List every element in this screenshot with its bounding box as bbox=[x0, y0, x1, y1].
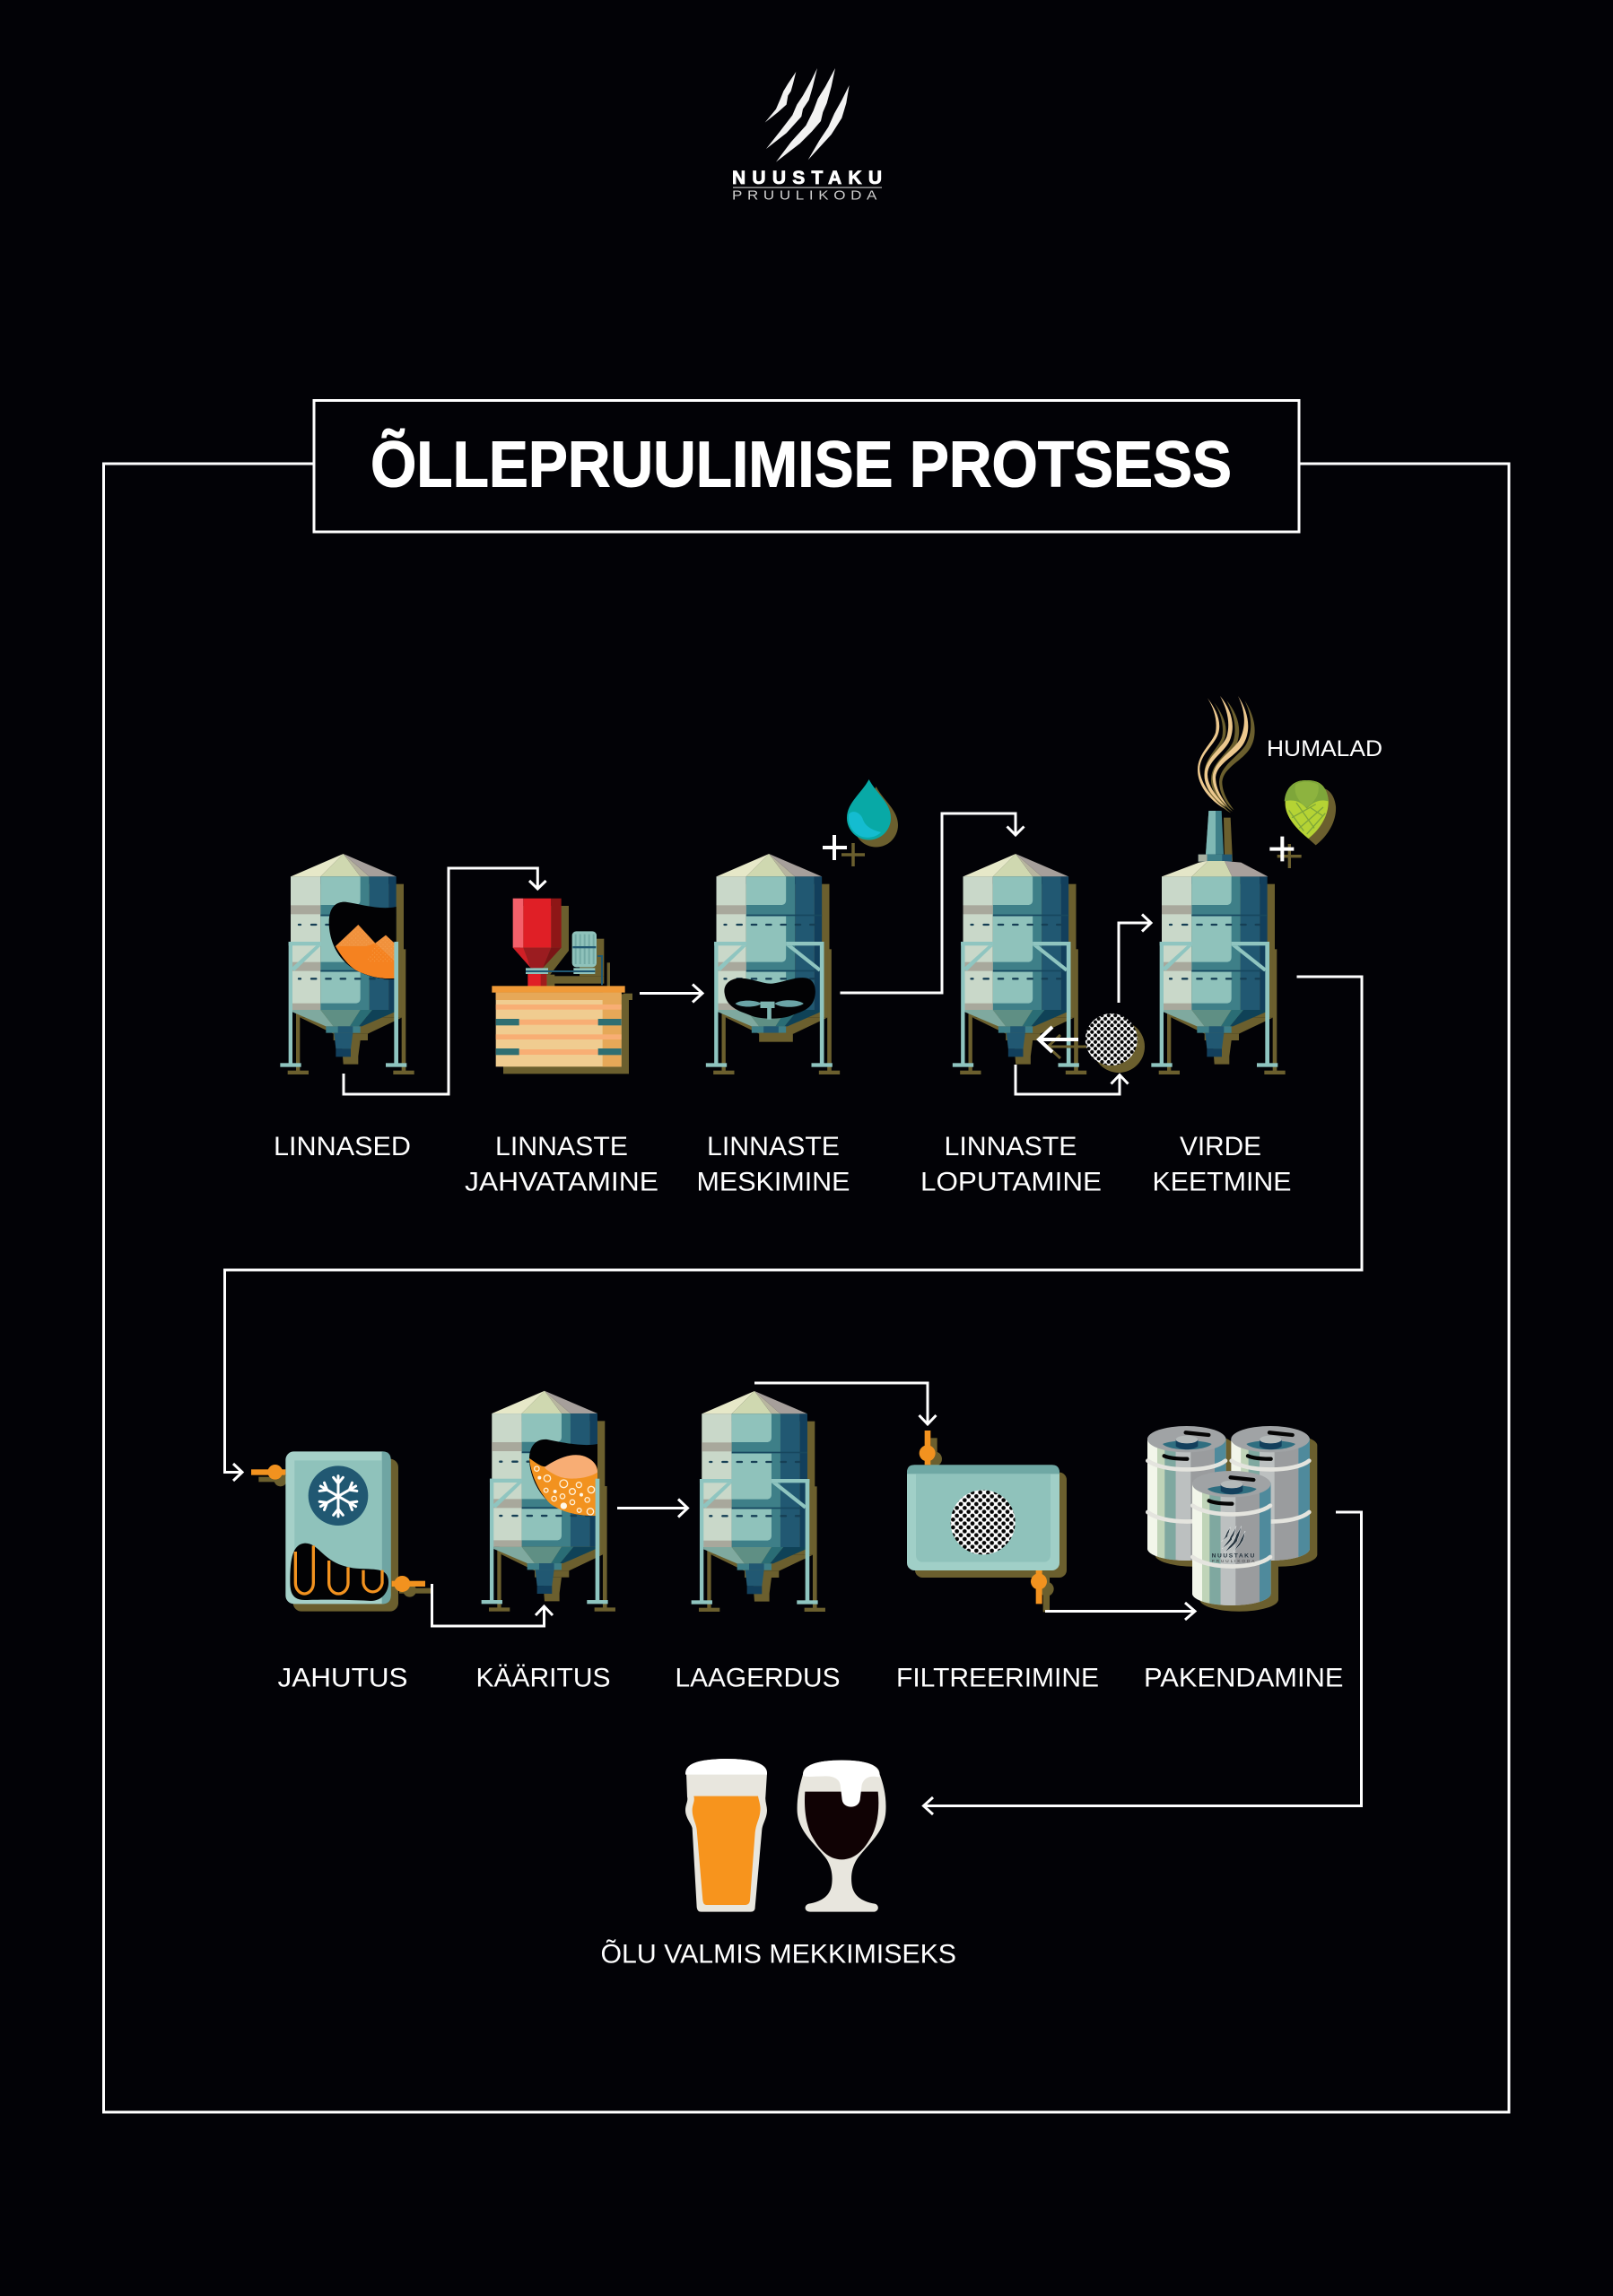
filter housing bbox=[907, 1465, 1059, 1570]
malt in tank bbox=[329, 902, 397, 979]
filter valves bbox=[920, 1431, 1047, 1604]
motor bbox=[526, 931, 603, 985]
logo: Nuustaku Pruulikoda: PRUULIKODA bbox=[732, 188, 882, 203]
arrow: sieve to lauter bbox=[1039, 1027, 1078, 1052]
tank: kettle bbox=[1151, 696, 1286, 1074]
arrow: sieve to kettle bbox=[1119, 915, 1151, 1003]
red hopper bbox=[513, 899, 562, 987]
keg front: NUUSTAKU bbox=[1212, 1553, 1255, 1560]
labels: second row: LAAGERDUS bbox=[675, 1663, 840, 1693]
mash blob with impeller bbox=[724, 978, 815, 1020]
keg back left bbox=[1147, 1426, 1226, 1563]
kegs bbox=[1147, 1426, 1317, 1612]
labels: first row: KEETMINE bbox=[1152, 1168, 1292, 1196]
snowflake badge bbox=[309, 1465, 368, 1526]
mill bbox=[492, 899, 632, 1074]
goblet bbox=[798, 1761, 886, 1912]
logo: Nuustaku Pruulikoda bbox=[732, 68, 882, 203]
pint glass bbox=[685, 1759, 767, 1912]
tank: lager bbox=[692, 1391, 825, 1612]
arrow: kegs to glasses bbox=[924, 1512, 1362, 1814]
steam and chimney bbox=[1198, 696, 1255, 862]
tank: fermenter bbox=[482, 1391, 615, 1612]
hop bbox=[1286, 780, 1329, 839]
filter mesh bbox=[951, 1490, 1016, 1554]
keg front: PRUULIKODA bbox=[1212, 1559, 1255, 1563]
label: humalad: HUMALAD bbox=[1267, 736, 1382, 761]
labels: first row: LINNASTE bbox=[495, 1132, 628, 1161]
arrow: mill to mash bbox=[640, 985, 702, 1003]
arrow: lager to filter bbox=[754, 1383, 937, 1424]
keg back right bbox=[1231, 1426, 1310, 1563]
labels: first row: VIRDE bbox=[1180, 1132, 1261, 1161]
title box bbox=[314, 400, 1299, 532]
fermenting beer bbox=[529, 1439, 597, 1516]
labels: first row bbox=[274, 1132, 1292, 1196]
arrow: mash to lauter bbox=[840, 813, 1024, 993]
labels: second row: JAHUTUS bbox=[278, 1663, 407, 1693]
labels: first row: JAHVATAMINE bbox=[465, 1168, 658, 1196]
mill shadow bbox=[503, 906, 632, 1074]
labels: first row: LOPUTAMINE bbox=[920, 1168, 1102, 1196]
filter shadow bbox=[915, 1438, 1067, 1612]
plus sign bbox=[1277, 844, 1302, 868]
water drop with plus bbox=[823, 779, 898, 866]
mash shaft shadow bbox=[759, 1033, 793, 1042]
labels: first row: LINNASTE bbox=[707, 1132, 840, 1161]
sieve shadow bbox=[1093, 1021, 1145, 1073]
tank: lauter bbox=[953, 854, 1086, 1074]
arrow: fermenter to lager tank bbox=[617, 1500, 687, 1518]
label: final: ÕLU VALMIS MEKKIMISEKS bbox=[601, 1939, 956, 1970]
wooden box bbox=[492, 986, 625, 1066]
arrow: kettle to cooler bbox=[224, 977, 1362, 1481]
arrow: lauter to sieve bbox=[1016, 1065, 1129, 1094]
beer glasses bbox=[685, 1759, 886, 1912]
arrow: malt to mill bbox=[344, 868, 546, 1094]
flat roof bbox=[1162, 861, 1268, 876]
logo: Nuustaku Pruulikoda: NUUSTAKU bbox=[732, 168, 882, 188]
cooling coil bbox=[290, 1544, 388, 1601]
sieve disc bbox=[1086, 1013, 1138, 1065]
labels: second row: PAKENDAMINE bbox=[1144, 1663, 1344, 1693]
drop bbox=[847, 779, 891, 839]
labels: first row: MESKIMINE bbox=[696, 1168, 850, 1196]
cooler body bbox=[285, 1451, 391, 1604]
cooler bbox=[251, 1451, 432, 1612]
labels: second row bbox=[278, 1663, 1344, 1693]
labels: first row: LINNASED bbox=[274, 1132, 411, 1161]
hop shadow bbox=[1293, 787, 1336, 845]
arrow: cooler to fermenter bbox=[432, 1584, 553, 1626]
labels: second row: FILTREERIMINE bbox=[896, 1663, 1099, 1693]
tank: mash bbox=[706, 854, 840, 1074]
labels: first row: LINNASTE bbox=[944, 1132, 1077, 1161]
hop cone with plus bbox=[1269, 780, 1336, 868]
tank: Linnased bbox=[280, 854, 414, 1074]
title: ÕLLEPRUULIMISE PROTSESS bbox=[371, 429, 1232, 500]
keg shadows bbox=[1155, 1433, 1317, 1612]
valves bbox=[251, 1465, 425, 1592]
labels: second row: KÄÄRITUS bbox=[475, 1663, 610, 1693]
plus sign bbox=[841, 843, 865, 866]
cooler shadow bbox=[258, 1459, 432, 1612]
outer frame bbox=[104, 464, 1509, 2112]
arrow: filter to kegs bbox=[1045, 1603, 1195, 1620]
sieve bbox=[1048, 1013, 1145, 1073]
drop shadow bbox=[854, 787, 898, 847]
keg front bbox=[1192, 1471, 1271, 1608]
filter bbox=[907, 1431, 1067, 1612]
